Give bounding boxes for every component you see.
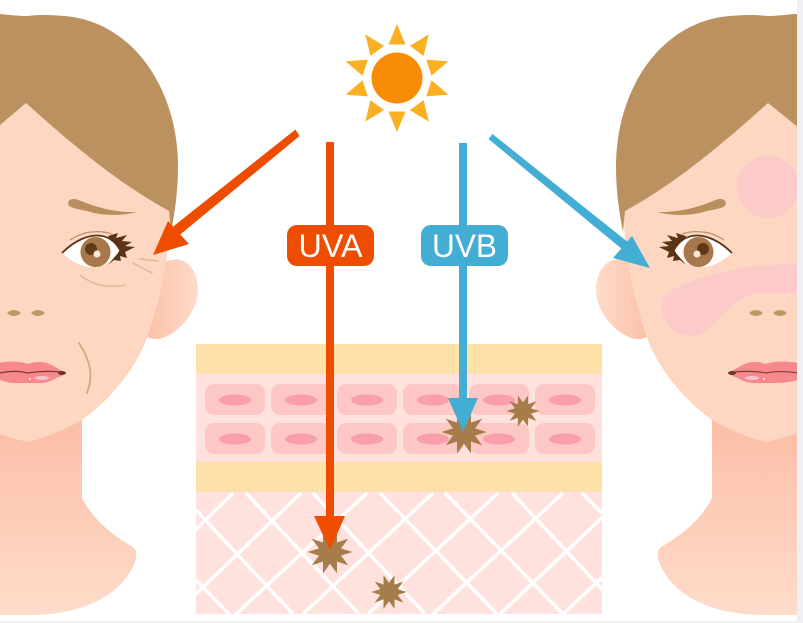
- left hair: [0, 14, 178, 232]
- left ear: [145, 260, 198, 339]
- damage star: lower: [371, 575, 407, 609]
- sun disc: [372, 52, 422, 104]
- left nose: [7, 310, 45, 316]
- arrow: UVB to face: [488, 134, 650, 268]
- right nose: [749, 310, 787, 316]
- arrow: UVB down: [448, 143, 478, 432]
- right eye: [659, 232, 732, 267]
- wrinkles: [79, 259, 158, 393]
- right face: UVB spots: [596, 14, 799, 615]
- label: UVA: [287, 225, 374, 266]
- sun rays: [343, 24, 451, 132]
- forehead sun spot: [737, 156, 799, 218]
- damage star: UVA impact: [308, 531, 352, 573]
- right eyebrow: [657, 199, 726, 215]
- right lips: [728, 362, 799, 383]
- arrow: UVA down: [314, 142, 345, 550]
- right face skin: [619, 60, 799, 442]
- left eyebrow: [68, 199, 137, 215]
- left lips: [0, 362, 66, 383]
- right hair: [616, 14, 799, 232]
- left neck: [0, 410, 136, 615]
- damage star: UVB impact: [442, 411, 486, 453]
- cheek sun spot: [662, 265, 799, 336]
- skin cells: [205, 384, 595, 454]
- left face: UVA wrinkles: [0, 14, 198, 615]
- skin cross-section: [196, 344, 602, 614]
- sun: [343, 24, 451, 132]
- right neck: [658, 410, 799, 615]
- label: UVB: UVB: [432, 228, 497, 264]
- label: UVA: UVA: [298, 228, 363, 264]
- arrow: UVA to face: [153, 130, 300, 255]
- left eye: [62, 232, 135, 267]
- epidermis layers: [196, 344, 602, 492]
- label: UVB: [421, 225, 508, 266]
- damage star: upper right: [506, 395, 540, 427]
- right ear: [596, 260, 649, 339]
- left face skin: [0, 60, 175, 442]
- dermis collagen lattice: [196, 492, 602, 614]
